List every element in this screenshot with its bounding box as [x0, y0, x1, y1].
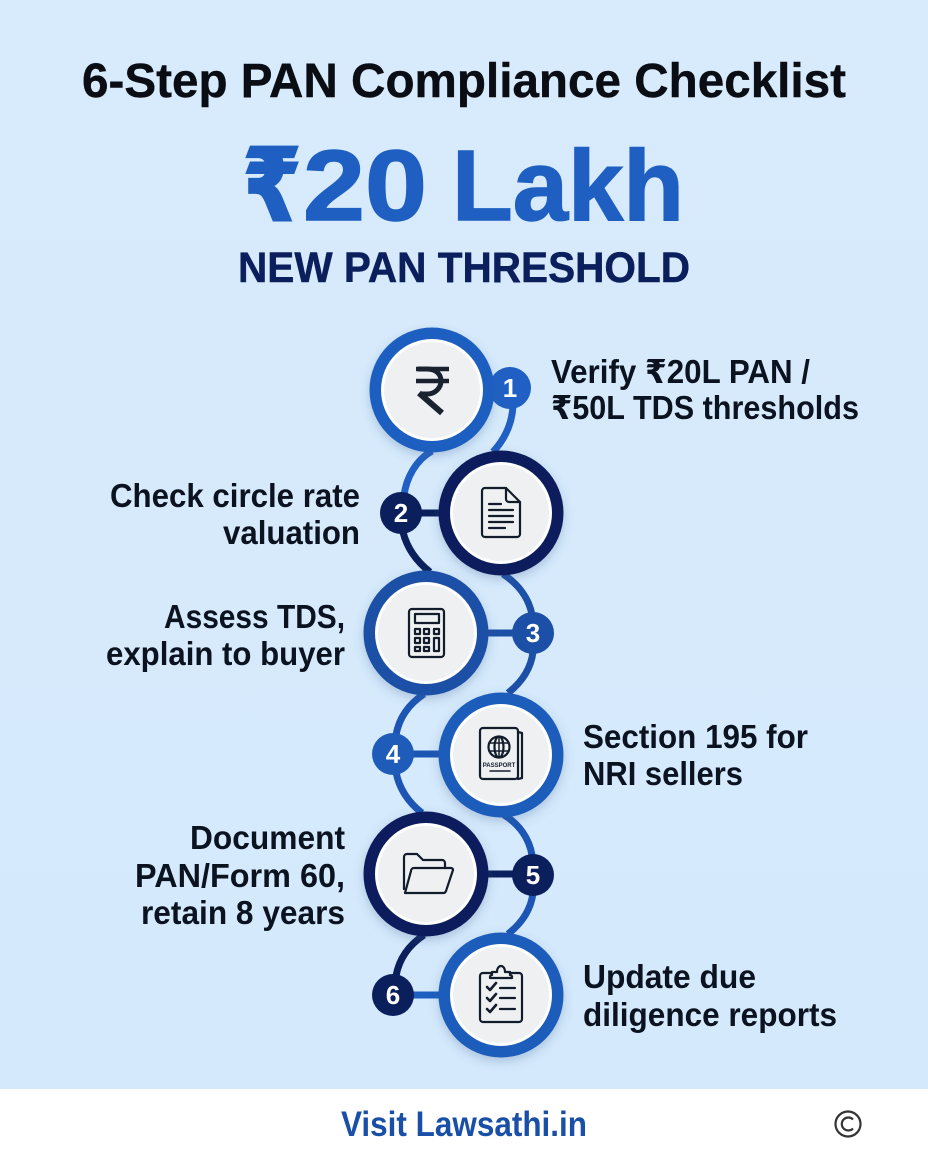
- headline figure: ₹: [243, 130, 301, 242]
- step 2 text: valuation: [223, 514, 360, 551]
- step 3 text: explain to buyer: [106, 635, 345, 672]
- step 6 number badge: 6: [386, 980, 400, 1010]
- step 1: [370, 328, 859, 452]
- icon: passport: [480, 728, 522, 779]
- step 3 number badge: [512, 612, 554, 654]
- step 1 ring: [370, 328, 494, 452]
- step 4 number badge: [372, 733, 414, 775]
- icon: folder: [404, 854, 453, 893]
- step 5: [135, 812, 554, 936]
- step 2 number badge: 2: [394, 498, 408, 528]
- footer link text: Visit Lawsathi.in: [341, 1105, 587, 1144]
- step 3 text: Assess TDS,: [164, 598, 345, 635]
- step 4 ring: [438, 692, 564, 818]
- step 3 number badge: 3: [526, 618, 540, 648]
- step 5 number badge: 5: [526, 860, 540, 890]
- step 6 text: [583, 958, 837, 1033]
- step 2 text: Check circle rate: [110, 477, 360, 514]
- step 6 text: diligence reports: [583, 996, 837, 1033]
- headline figure: [243, 130, 684, 242]
- subtitle: NEW PAN THRESHOLD: [238, 244, 690, 292]
- icon: document: [482, 488, 520, 537]
- step 2 ring: [438, 450, 564, 576]
- step 3: [106, 570, 554, 696]
- step 5 number badge: [512, 854, 554, 896]
- step 4: [372, 692, 808, 818]
- step 2 number badge: [380, 492, 422, 534]
- step 5 ring: [364, 812, 488, 936]
- step 3 ring: [364, 570, 488, 696]
- step 2: [110, 450, 564, 576]
- step 4 text: [583, 718, 808, 792]
- step 1 number badge: [489, 367, 531, 409]
- icon: clipboard checklist: [480, 966, 522, 1022]
- step 6 number badge: [372, 974, 414, 1016]
- step 1 text: [551, 353, 859, 426]
- step 5 text: retain 8 years: [141, 894, 345, 931]
- icon: rupee: [416, 369, 449, 413]
- step 4 number badge: 4: [386, 739, 401, 769]
- icon: passport: PASSPORT: [483, 763, 516, 769]
- step 4 text: NRI sellers: [583, 755, 743, 792]
- headline figure: Lakh: [452, 130, 684, 242]
- step 1 text: ₹50L TDS thresholds: [551, 389, 859, 426]
- step 2 text: [110, 477, 360, 551]
- icon: calculator: [409, 609, 444, 657]
- step 6 ring: [438, 932, 564, 1058]
- step 1 number badge: 1: [503, 373, 517, 403]
- copyright symbol: [836, 1112, 860, 1136]
- step 6: [372, 932, 837, 1058]
- headline figure: 20: [303, 130, 427, 242]
- step 5 text: Document: [190, 819, 345, 856]
- footer band: [0, 1089, 928, 1152]
- step 1 text: Verify ₹20L PAN /: [551, 353, 810, 390]
- title: 6-Step PAN Compliance Checklist: [82, 55, 846, 108]
- step 4 text: Section 195 for: [583, 718, 808, 755]
- connecting timeline path: [396, 406, 533, 995]
- step 3 text: [106, 598, 345, 672]
- step 6 text: Update due: [583, 958, 756, 995]
- step 5 text: [135, 819, 345, 931]
- step 5 text: PAN/Form 60,: [135, 857, 345, 894]
